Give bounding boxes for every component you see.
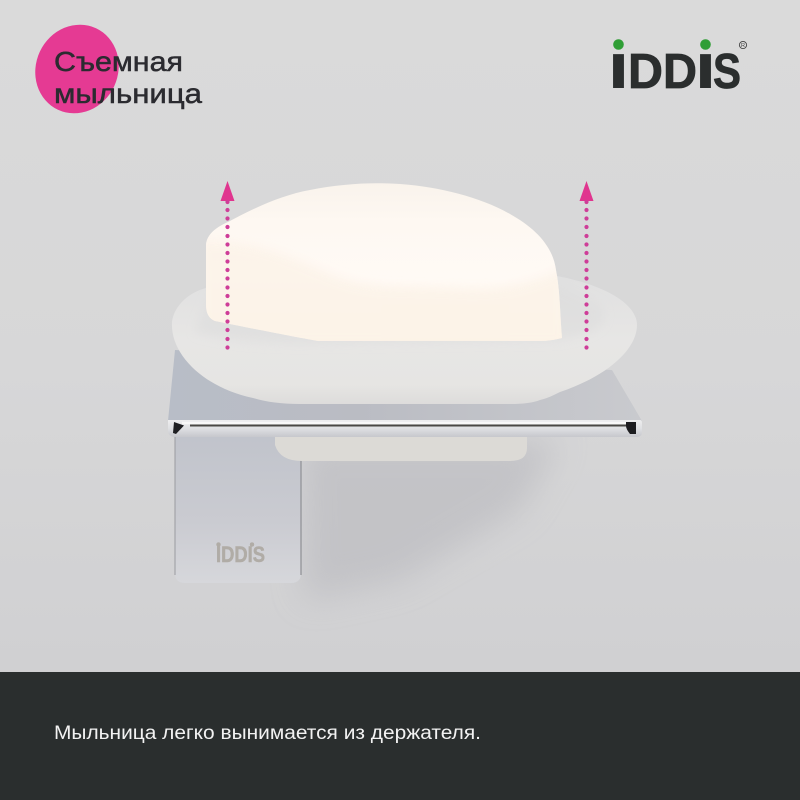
footer band <box>0 672 800 800</box>
arrow: right <box>580 181 594 350</box>
soap dish holder <box>168 350 642 583</box>
pink blob <box>21 11 133 127</box>
arrow: left <box>220 181 234 350</box>
brand logo: R <box>741 43 745 49</box>
brand logo: D <box>663 45 697 99</box>
brand logo: D <box>628 45 663 99</box>
shadow under shelf <box>300 440 560 600</box>
brand logo <box>608 39 747 99</box>
shelf front edge <box>168 420 642 437</box>
brand logo: I <box>608 45 629 99</box>
frosted dish <box>172 276 637 404</box>
brand logo: I <box>695 45 716 99</box>
caption: Мыльница легко вынимается из держателя. <box>54 723 481 744</box>
shelf top plate <box>168 350 642 421</box>
dish underside <box>275 437 527 461</box>
wall bracket <box>175 430 301 583</box>
heading <box>54 46 202 109</box>
soap bar <box>200 183 565 345</box>
brand logo: S <box>713 45 741 99</box>
heading: мыльница <box>54 78 202 109</box>
heading: Съемная <box>54 46 183 77</box>
engraved logo: IDDIS <box>216 542 265 567</box>
